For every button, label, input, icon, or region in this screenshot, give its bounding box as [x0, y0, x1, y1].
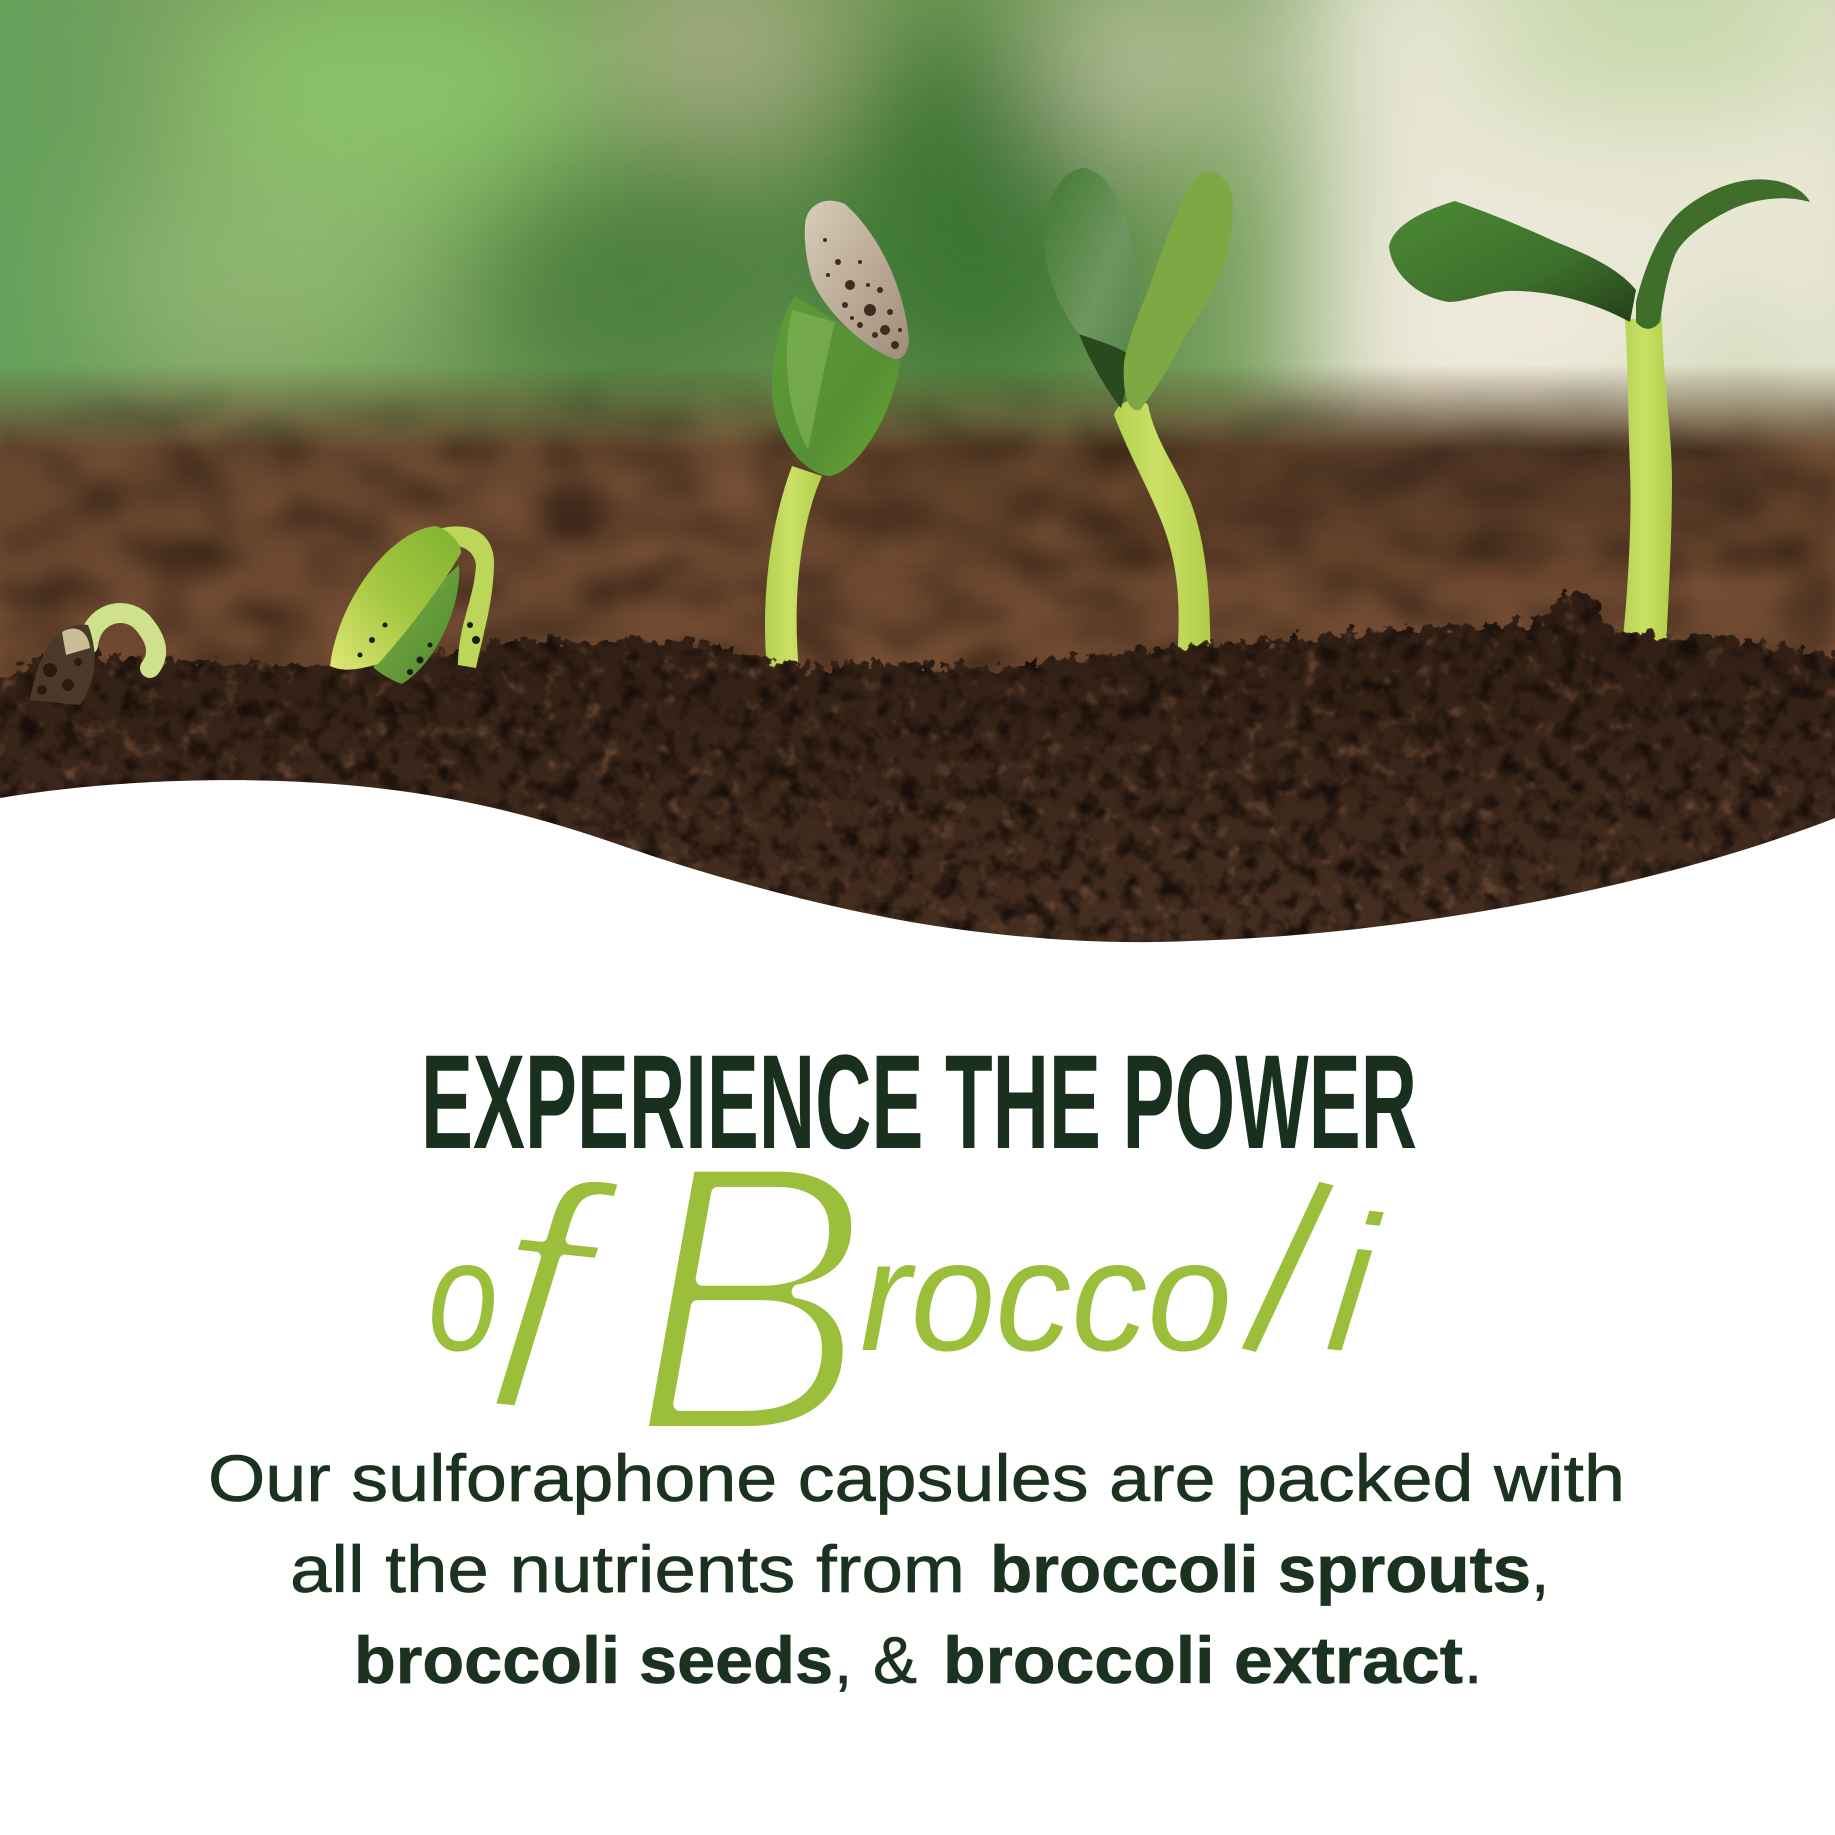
- bud leaf: [772, 296, 900, 476]
- left leaf: [1043, 168, 1138, 408]
- script heading: of Broccoli: i: [1318, 1171, 1390, 1398]
- plant stage 2: emerging leaves: [330, 526, 494, 684]
- body line 1: Our sulforaphone capsules are packed with: [208, 1441, 1625, 1515]
- script heading: of Broccoli: f: [471, 1107, 695, 1491]
- body line 2: all the nutrients from: [290, 1532, 965, 1606]
- body line 3: &: [873, 1623, 917, 1697]
- body text: [208, 1441, 1625, 1697]
- right leaf: [1636, 179, 1810, 329]
- script heading: of Broccoli: rocco: [860, 1208, 1232, 1384]
- body line 2: broccoli sprouts: [990, 1532, 1531, 1606]
- arched stem: [442, 526, 494, 668]
- body line 3: broccoli extract: [943, 1623, 1463, 1697]
- plant stage 4: two opening leaves: [1043, 168, 1233, 680]
- script heading: of Broccoli: o: [428, 1208, 498, 1384]
- near soil mound: [0, 590, 1835, 1000]
- script heading: of Broccoli: B: [630, 1080, 870, 1516]
- white wave panel: [0, 780, 1835, 1835]
- body line 2: ,: [1531, 1532, 1549, 1606]
- body line 3: ,: [834, 1623, 852, 1697]
- left leaf: [1389, 201, 1636, 322]
- body line 3: broccoli seeds: [354, 1623, 833, 1697]
- plant stage 5: mature seedling: [1389, 179, 1810, 665]
- right leaf: [1124, 172, 1233, 410]
- script heading: of Broccoli: l: [1218, 1123, 1352, 1420]
- stem 5: [1620, 315, 1672, 665]
- body line 3: .: [1464, 1623, 1482, 1697]
- blurred mid-ground soil: [0, 369, 1835, 679]
- plant stage 3: seed coat lifting: [765, 201, 909, 680]
- seed coat: [805, 201, 909, 359]
- stem 3: [765, 466, 822, 680]
- outer leaf: [330, 526, 461, 670]
- plant stage 1: germinating sprout: [30, 613, 156, 705]
- inner leaf: [373, 565, 459, 684]
- blurred green background: [0, 0, 1835, 500]
- stem 4: [1114, 400, 1210, 680]
